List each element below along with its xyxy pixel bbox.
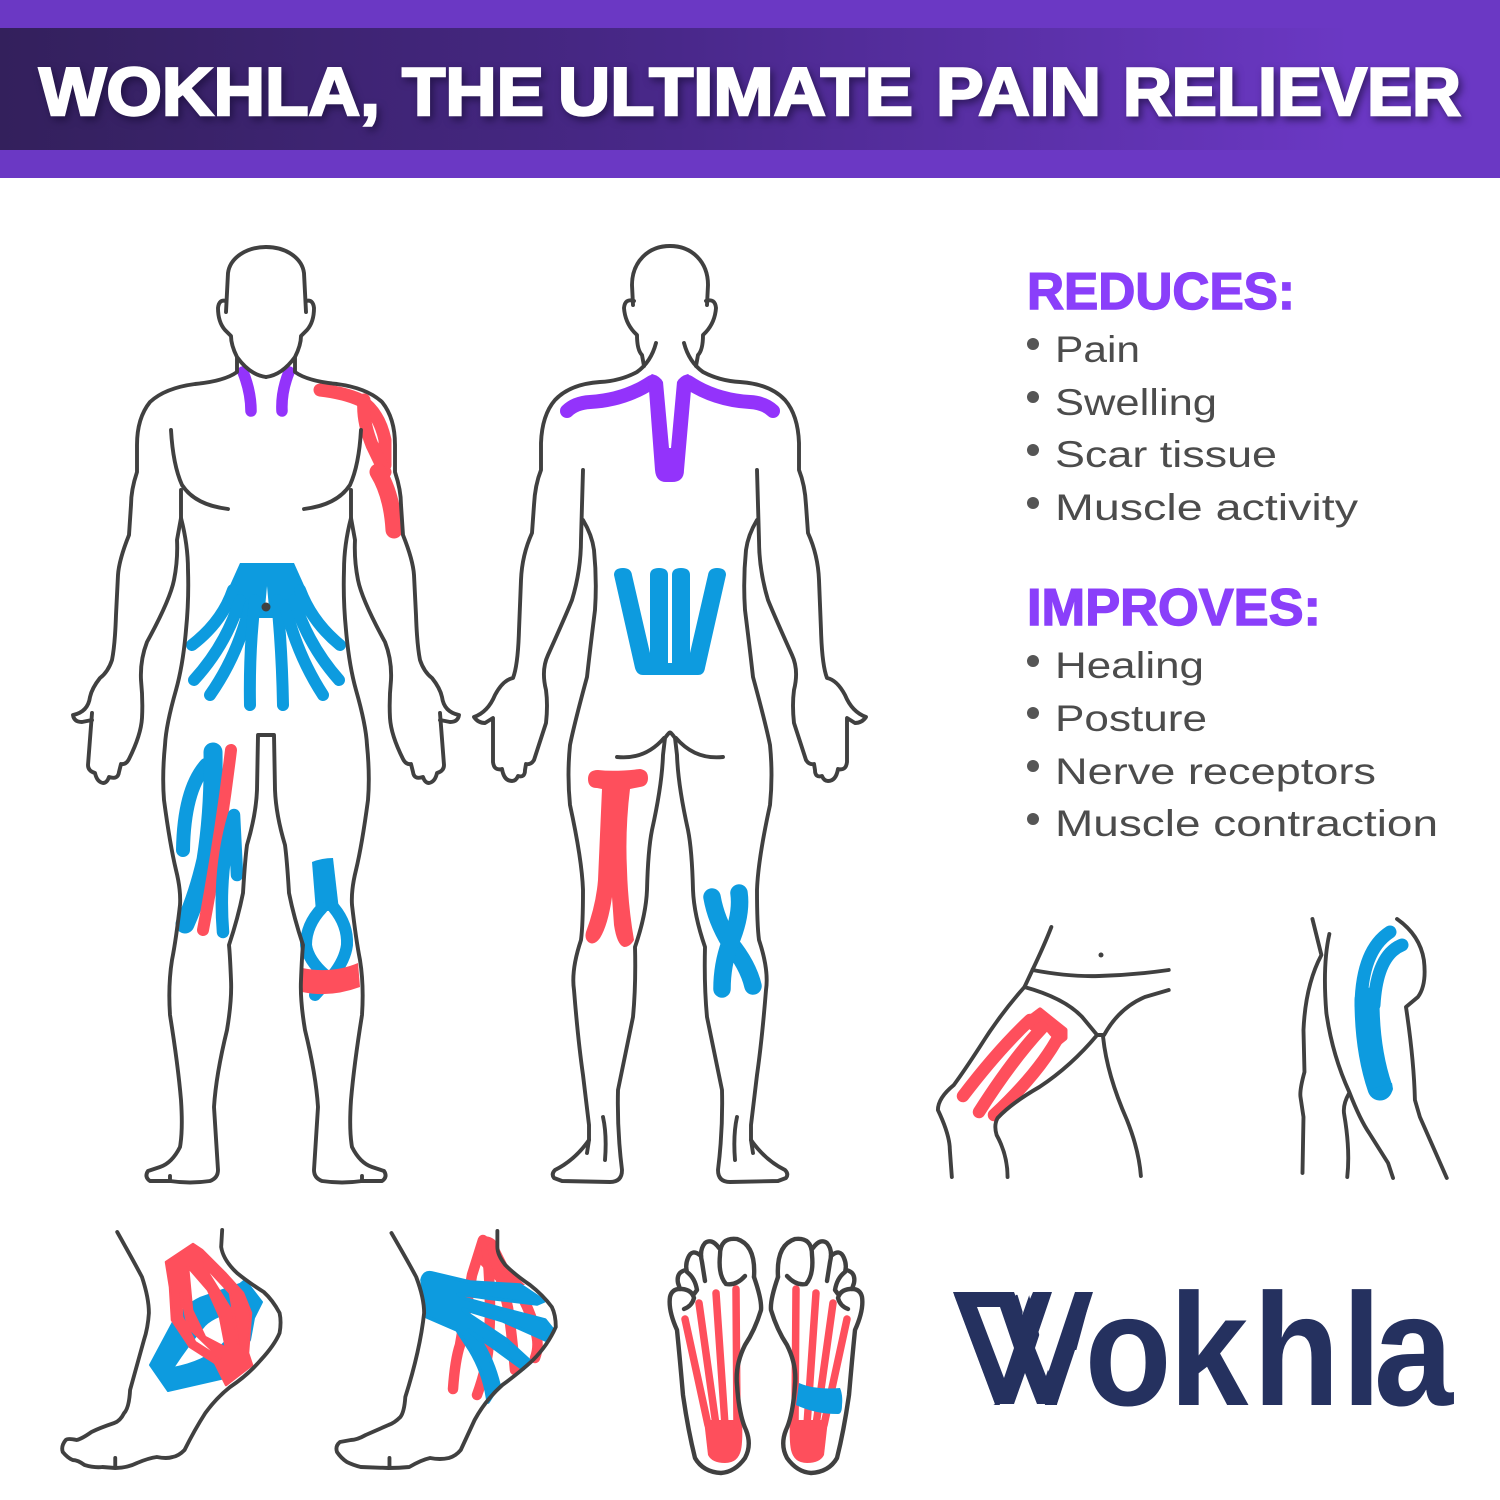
item: muscle contraction: Muscle contraction	[1055, 803, 1438, 844]
tape: arch blue	[796, 1383, 842, 1414]
tape: neck purple	[243, 372, 289, 411]
tape: abdomen blue fan	[192, 563, 340, 705]
panel: improves list	[1027, 579, 1438, 844]
tape: lower back blue	[614, 568, 726, 675]
tape: red ankle	[166, 1244, 252, 1385]
tape: glute blue	[1361, 932, 1402, 1098]
title: PAIN	[936, 54, 1101, 130]
title: ULTIMATE	[558, 54, 913, 130]
title: WOKHLA,	[39, 54, 380, 130]
navel	[1098, 952, 1104, 958]
illustration: soles of feet with tape	[670, 1239, 862, 1473]
title: THE	[402, 54, 544, 130]
foot outline	[336, 1231, 556, 1468]
tape: upper back purple	[567, 374, 773, 482]
tape: thigh blue and red	[183, 750, 237, 932]
item: swelling: Swelling	[1055, 382, 1217, 423]
illustration: front hip with red tape	[938, 927, 1169, 1177]
heading: reduces: REDUCES:	[1027, 263, 1295, 321]
item: healing: Healing	[1055, 645, 1204, 686]
panel: reduces list	[1027, 263, 1359, 528]
tape: shoulder red	[320, 390, 394, 530]
item: scar tissue: Scar tissue	[1055, 434, 1277, 475]
tape: sole red	[685, 1289, 742, 1463]
illustration: heel side with red and blue tape	[336, 1231, 556, 1468]
figure: back body with tape	[474, 246, 866, 1182]
heading: improves: IMPROVES:	[1027, 579, 1321, 637]
item: posture: Posture	[1055, 698, 1207, 739]
title banner	[0, 0, 1500, 178]
tape: blue ankle	[150, 1280, 262, 1391]
logo W shape	[945, 1290, 1093, 1410]
foot outline	[62, 1230, 281, 1468]
tape: red fan	[453, 1236, 538, 1395]
tape: hamstring red	[586, 769, 648, 947]
sole outline	[670, 1239, 761, 1473]
tape: knee blue and red	[302, 858, 360, 995]
body outline back	[474, 246, 866, 1182]
tape: quad red	[963, 1010, 1065, 1115]
item: pain: Pain	[1055, 329, 1140, 370]
side outline	[1300, 919, 1447, 1178]
title: RELIEVER	[1123, 54, 1461, 130]
illustration: ankle side with red and blue tape	[62, 1230, 281, 1468]
hip outline	[938, 927, 1169, 1177]
body outline front	[73, 247, 459, 1182]
figure: front body with tape	[73, 247, 459, 1182]
logo: Wokhla: Wokhla	[953, 1261, 1455, 1440]
illustration: side hip with blue tape	[1300, 919, 1447, 1178]
tape: back of knee blue X	[712, 893, 753, 989]
item: nerve receptors: Nerve receptors	[1055, 751, 1376, 792]
item: muscle activity: Muscle activity	[1055, 487, 1359, 528]
tape: blue fan	[422, 1273, 553, 1402]
item: pain	[1027, 329, 1140, 370]
